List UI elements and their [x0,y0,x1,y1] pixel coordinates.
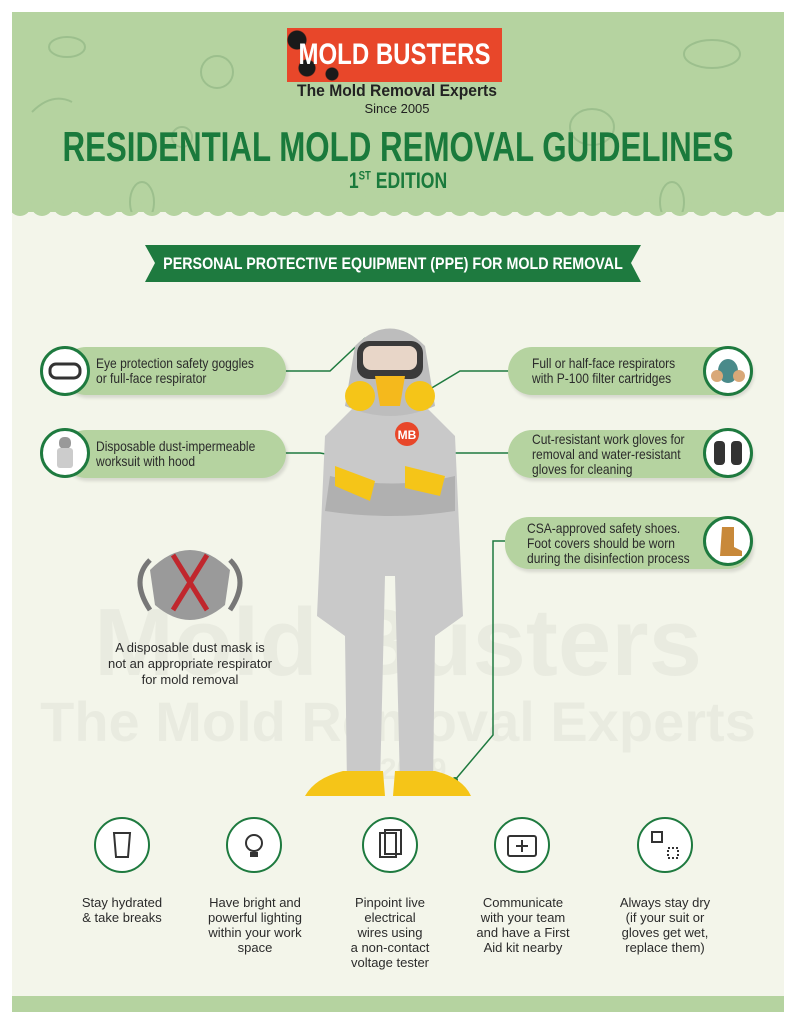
icon: suit [40,428,90,478]
pill: respirators: Full or half-face respirators [532,355,675,371]
footer bar [12,996,784,1012]
tip: hydrated [82,817,162,925]
watermark: Mold Busters [94,589,702,696]
tip: first aid [476,817,570,955]
tip: voltage [351,817,430,970]
pill: shoes: CSA-approved safety shoes. [527,520,680,536]
tip: lighting: Have bright and [209,895,301,910]
pill: goggles: or full-face respirator [96,370,206,386]
pill: gloves: gloves for cleaning [532,460,632,476]
tip: first aid: Aid kit nearby [484,940,562,955]
tip: voltage: electrical [364,910,416,925]
logo box: MOLD BUSTERS [298,38,490,71]
icon: crossed mask [137,550,243,620]
icon: respirator [703,346,753,396]
tip: lighting: within your work [208,925,302,940]
figure: worker in hazmat suit: MB [398,428,417,442]
logo box [287,28,502,82]
tip: first aid: and have a First [476,925,570,940]
figure: worker in hazmat suit [305,328,471,796]
scallop edge [12,212,776,216]
watermark [40,589,756,786]
ribbon heading: PERSONAL PROTECTIVE EQUIPMENT (PPE) FOR MOLD REMOVAL [163,254,623,273]
tip: hydrated: Stay hydrated [82,895,162,910]
tip: voltage: a non-contact [351,940,429,955]
since: Since 2005 [364,101,430,116]
tip: voltage: Pinpoint live [355,895,425,910]
tip: first aid: Communicate [483,895,563,910]
tip: lighting [208,817,302,955]
text: A disposable dust mask is [115,640,265,655]
tip: voltage: wires using [357,925,423,940]
edition: 1ST EDITION [349,168,447,193]
tip: stay dry: replace them) [625,940,705,955]
icon: goggles [40,346,90,396]
text [108,640,272,687]
text: for mold removal [142,672,238,687]
tip: stay dry: Always stay dry [620,895,710,910]
pill: respirators: with P-100 filter cartridges [532,370,671,386]
tip: stay dry [620,817,710,955]
title: RESIDENTIAL MOLD REMOVAL GUIDELINES [62,123,734,170]
header band [12,12,784,212]
pill: shoes [505,517,752,569]
tip: stay dry: gloves get wet, [622,925,708,940]
pill: goggles [62,347,286,395]
watermark: © 2019 [349,753,447,786]
tip: lighting: powerful lighting [208,910,302,925]
tip: lighting: space [238,940,272,955]
watermark: The Mold Removal Experts [40,690,756,753]
tip: first aid: with your team [481,910,565,925]
pill: worksuit: worksuit with hood [96,453,195,469]
logo [287,28,502,116]
pill: gloves: removal and water-resistant [532,446,681,462]
pill: worksuit [62,430,286,478]
tip: voltage: voltage tester [351,955,429,970]
dust mask warning [108,550,272,687]
icon: gloves [703,428,753,478]
ribbon heading [145,245,641,282]
pill: gloves: Cut-resistant work gloves for [532,430,685,446]
header decorative microbes [32,36,741,212]
tip: stay dry: (if your suit or [626,910,704,925]
icon: boot [703,516,753,566]
pill: worksuit: Disposable dust-impermeable [96,438,255,454]
tagline: The Mold Removal Experts [297,81,497,100]
pill: shoes: during the disinfection process [527,550,690,566]
pill: goggles: Eye protection safety goggles [96,355,254,371]
pill: gloves [508,430,752,478]
pill: shoes: Foot covers should be worn [527,534,675,550]
tip: hydrated: & take breaks [82,910,162,925]
pill: respirators [508,347,752,395]
text: not an appropriate respirator [108,656,272,671]
